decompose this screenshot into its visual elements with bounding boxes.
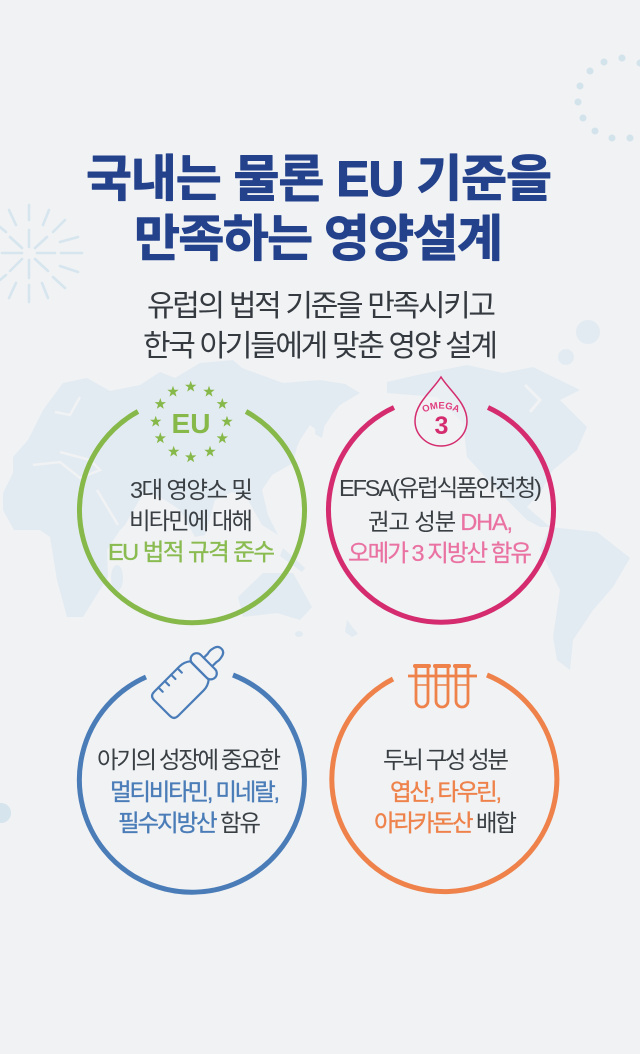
- EU text: [108, 477, 275, 565]
- omega text: EFSA(유럽식품안전청): [339, 475, 542, 501]
- icon: test tubes: [408, 666, 477, 707]
- EU text: 비타민에 대해: [129, 508, 253, 534]
- world map background: [3, 320, 630, 670]
- subtitle: 유럽의 법적 기준을 만족시키고: [147, 290, 496, 323]
- pink ring: [329, 408, 554, 622]
- panel: omega 3: [326, 376, 556, 625]
- title: 만족하는 영양설계: [134, 211, 503, 267]
- icon: omega 3 drop: OMEGA: [422, 402, 458, 412]
- multivitamin text: 필수지방산 함유: [118, 810, 261, 836]
- brain nutrients text: 아라카돈산 배합: [374, 810, 517, 836]
- green ring: [80, 412, 305, 623]
- blue ring: [79, 675, 304, 892]
- firework decoration: [0, 205, 82, 302]
- icon: omega 3 drop: 3: [435, 412, 448, 440]
- panel: multivitamin: [79, 637, 304, 892]
- orange ring: [332, 675, 557, 892]
- side dot decoration: [0, 803, 11, 823]
- EU text: 3대 영양소 및: [130, 477, 253, 503]
- panel: EU: [80, 381, 305, 623]
- omega text: [339, 475, 542, 566]
- subtitle: 한국 아기들에게 맞춘 영양 설계: [143, 330, 498, 363]
- icon: EU stars: [150, 381, 233, 462]
- icon: baby bottle: [150, 637, 233, 720]
- multivitamin text: 멀티비타민, 미네랄,: [110, 779, 280, 805]
- brain nutrients text: 엽산, 타우린,: [390, 779, 502, 805]
- panel: brain nutrients: [332, 666, 557, 892]
- icon: omega 3 drop: [414, 376, 468, 447]
- title: 국내는 물론 EU 기준을: [86, 151, 552, 207]
- multivitamin text: 아기의 성장에 중요한: [97, 747, 281, 773]
- EU text: EU 법적 규격 준수: [108, 539, 275, 565]
- subtitle: [143, 290, 498, 363]
- omega text: 오메가 3 지방산 함유: [348, 540, 532, 566]
- brain nutrients text: 두뇌 구성 성분: [383, 747, 509, 773]
- brain nutrients text: [374, 747, 517, 836]
- multivitamin text: [97, 747, 281, 836]
- icon: EU stars: EU: [172, 408, 210, 439]
- dotted ring decoration: [574, 54, 640, 142]
- omega text: 권고 성분 DHA,: [368, 509, 513, 535]
- title: [86, 151, 552, 267]
